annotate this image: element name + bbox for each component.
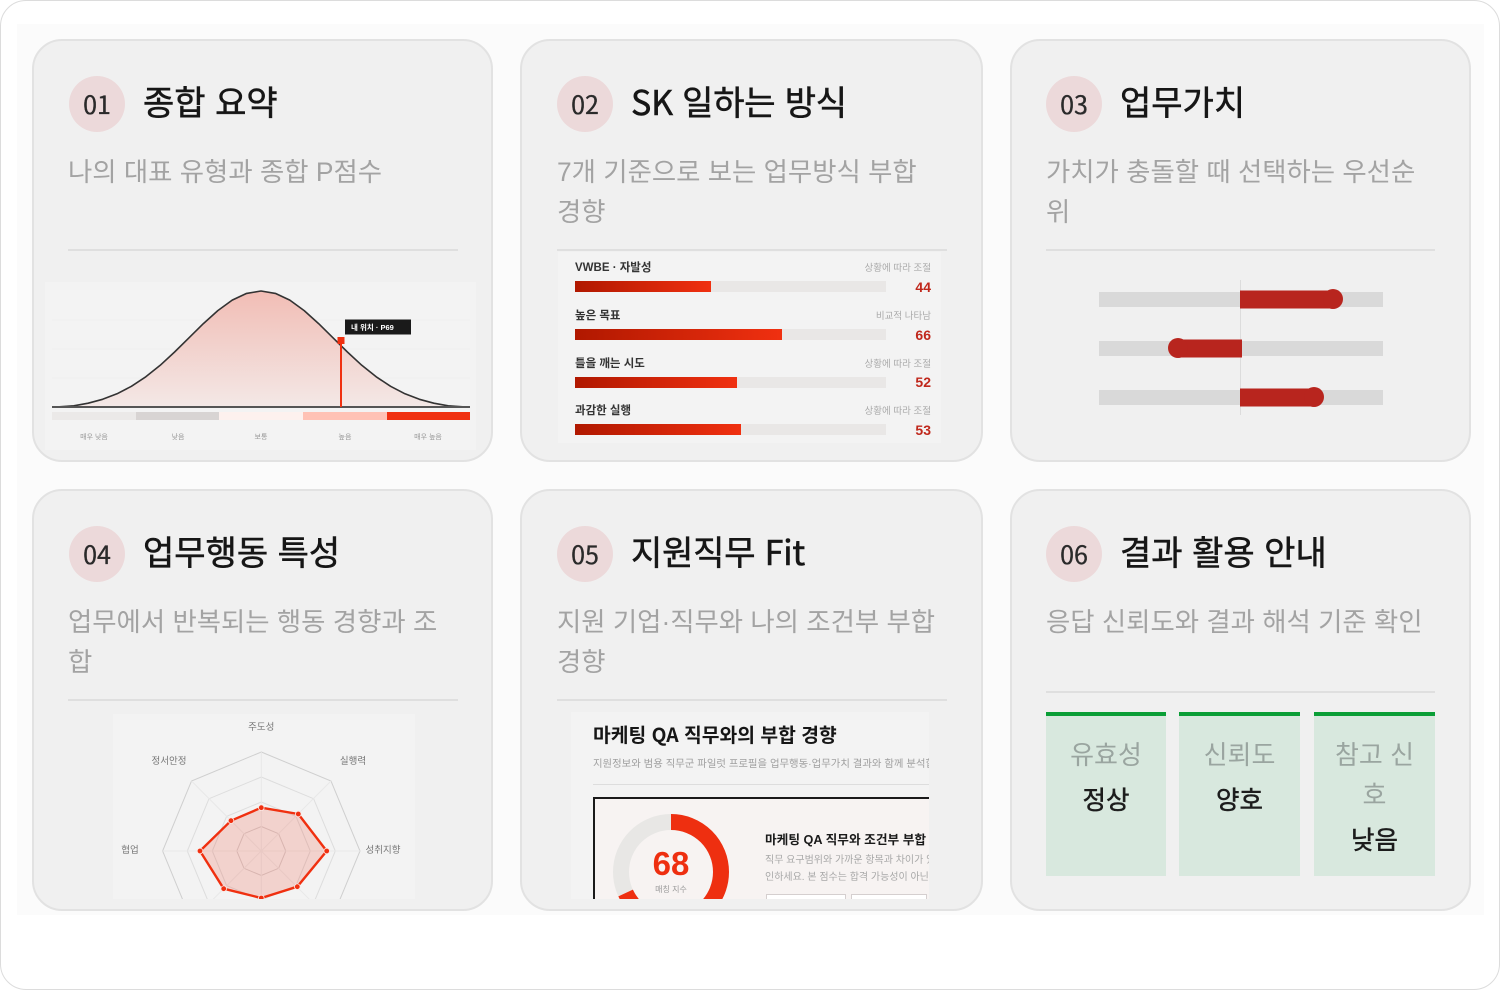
radar chart: 협업 — [121, 844, 139, 856]
report title: 마케팅 QA 직무와의 부합 경향 — [593, 720, 837, 748]
description 06: 응답 신뢰도와 결과 해석 기준 확인 — [1046, 607, 1423, 637]
number badge 03 — [1046, 76, 1102, 132]
description 03 — [1046, 157, 1415, 227]
description 02: 경향 — [557, 197, 606, 227]
bell curve chart: 높음 — [339, 433, 352, 441]
number badge 04: 04 — [83, 536, 111, 572]
number badge 02 — [557, 76, 613, 132]
donut gauge 68: 매칭 지수 — [655, 885, 687, 894]
description 04 — [68, 607, 437, 677]
bar list — [558, 252, 941, 443]
status: reference signal: 낮음 — [1351, 827, 1398, 855]
description 02: 7개 기준으로 보는 업무방식 부합 — [557, 157, 917, 187]
bell curve chart: 매우 높음 — [414, 433, 442, 441]
number badge 06: 06 — [1060, 536, 1088, 572]
panel: 04 work behavior traits — [32, 489, 493, 911]
number badge 05 — [557, 526, 613, 582]
radar chart — [121, 722, 401, 899]
number badge 02: 02 — [571, 86, 599, 122]
bar row: VWBE: VWBE · 자발성 — [575, 262, 651, 274]
bar row: high goals: 높은 목표 — [575, 310, 621, 322]
donut gauge 68: 68 — [653, 845, 689, 882]
bar row: VWBE: 44 — [915, 279, 931, 295]
bar row: bold execution: 상황에 따라 조절 — [865, 406, 931, 417]
bar row: high goals: 비교적 나타남 — [876, 311, 931, 322]
radar chart: 정서안정 — [152, 756, 186, 767]
description 05: 경향 — [557, 647, 606, 677]
heading 06: 결과 활용 안내 — [1120, 526, 1327, 575]
description 03: 위 — [1046, 197, 1070, 227]
number badge 03: 03 — [1060, 86, 1088, 122]
donut gauge 68 — [613, 814, 729, 899]
number badge 04 — [69, 526, 125, 582]
fit report preview — [571, 712, 929, 899]
number badge 01 — [69, 76, 125, 132]
status: validity — [1046, 712, 1166, 876]
result heading: 마케팅 QA 직무와 조건부 부합 — [765, 833, 926, 847]
bar row: breaking the mold: 상황에 따라 조절 — [865, 359, 931, 370]
description 04: 업무에서 반복되는 행동 경향과 조 — [68, 607, 437, 637]
heading 04: 업무행동 특성 — [143, 526, 340, 575]
heading 01: 종합 요약 — [143, 76, 278, 125]
status: reliability: 신뢰도 — [1204, 740, 1275, 770]
status: reliability — [1179, 712, 1300, 876]
description 02 — [557, 157, 917, 227]
radar chart: 주도성 — [248, 722, 274, 733]
panel: 02 SK way of working — [520, 39, 983, 462]
status: reliability: 양호 — [1216, 787, 1263, 815]
description 01: 나의 대표 유형과 종합 P점수 — [68, 157, 382, 187]
panel: 03 work values — [1010, 39, 1471, 462]
bar row: VWBE: 상황에 따라 조절 — [865, 263, 931, 274]
bar row: bold execution: 과감한 실행 — [575, 405, 631, 417]
description 04: 합 — [68, 647, 92, 677]
status: reference signal — [1314, 712, 1435, 876]
number badge 06 — [1046, 526, 1102, 582]
bell curve chart: 보통 — [255, 433, 268, 441]
heading 02: SK 일하는 방식 — [631, 76, 847, 125]
bar row: VWBE — [575, 261, 931, 295]
result text — [765, 854, 929, 882]
description 05 — [557, 607, 935, 677]
bell curve chart: 내 위치 · P69 — [351, 322, 394, 332]
result box — [593, 797, 953, 917]
panel: 05 job fit — [520, 489, 983, 911]
bell curve chart: 매우 낮음 — [80, 432, 108, 441]
bar row: bold execution — [575, 404, 931, 438]
bell curve chart — [52, 290, 470, 441]
bell curve chart: 낮음 — [172, 432, 185, 441]
panel: 01 summary — [32, 39, 493, 462]
number badge 01: 01 — [83, 86, 111, 122]
bar row: breaking the mold: 52 — [915, 374, 931, 390]
heading 05: 지원직무 Fit — [631, 526, 805, 575]
diverging value bars — [1099, 280, 1383, 415]
description 03: 가치가 충돌할 때 선택하는 우선순 — [1046, 157, 1415, 187]
bar row: bold execution: 53 — [915, 422, 931, 438]
description 05: 지원 기업·직무와 나의 조건부 부합 — [557, 607, 935, 637]
heading 03: 업무가치 — [1120, 76, 1245, 125]
bar row: high goals — [575, 310, 931, 343]
radar chart: 성취지향 — [366, 844, 401, 856]
mini card right — [851, 894, 927, 914]
radar chart: 실행력 — [340, 755, 366, 767]
mini card left — [766, 894, 846, 914]
number badge 05: 05 — [571, 536, 599, 572]
status: validity: 유효성 — [1070, 740, 1142, 770]
bar row: breaking the mold — [575, 357, 931, 390]
bar row: high goals: 66 — [915, 327, 931, 343]
bar row: breaking the mold: 틀을 깨는 시도 — [575, 358, 645, 370]
status: reference signal: 호 — [1363, 780, 1386, 810]
status: reference signal: 참고 신 — [1335, 740, 1414, 770]
status: validity: 정상 — [1083, 787, 1129, 815]
panel: 06 result guide — [1010, 489, 1471, 911]
